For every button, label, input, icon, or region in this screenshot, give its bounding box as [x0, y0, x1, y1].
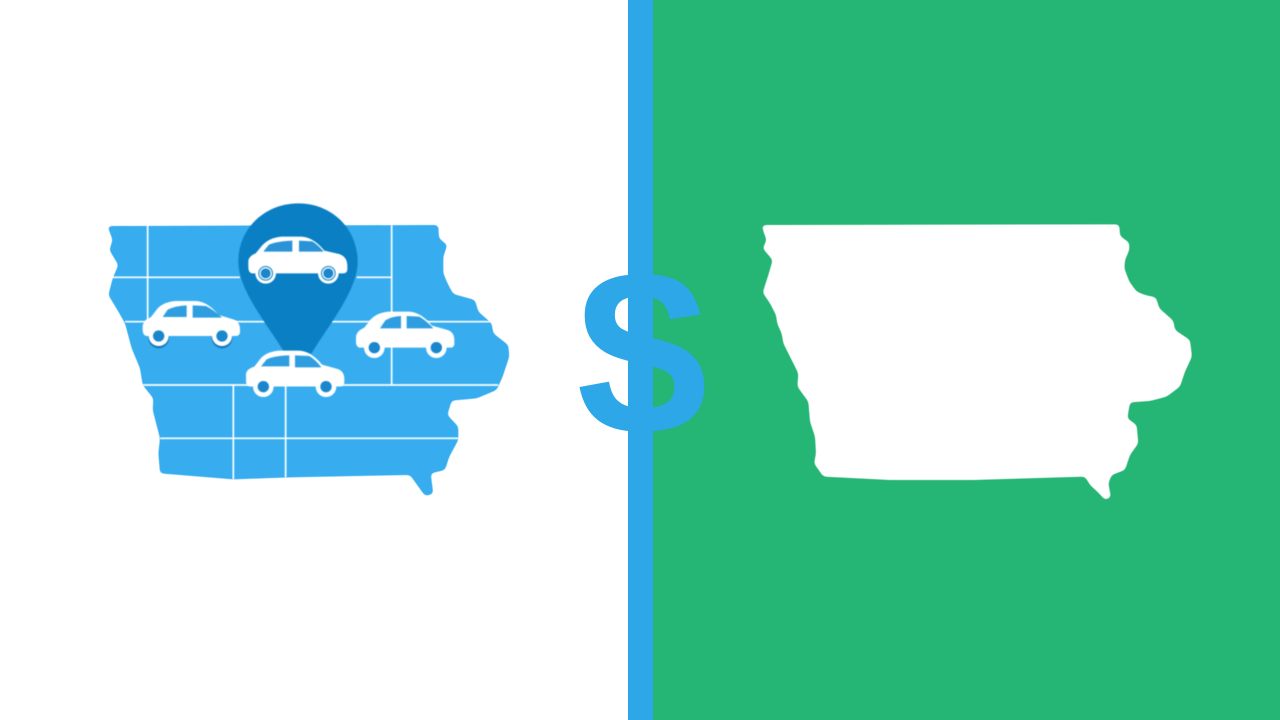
map: white county lines [112, 225, 498, 479]
icon: location pin [238, 203, 358, 353]
icon: blue Iowa map with pin and cars [107, 203, 509, 496]
icon: car right [356, 312, 454, 358]
icon: dollar sign: $ [576, 221, 708, 485]
icon: car in pin [248, 237, 347, 284]
icon: car bottom [246, 351, 344, 397]
icon: car left [143, 301, 240, 348]
blue vertical divider strip [628, 0, 653, 720]
panel: green right background [652, 0, 1280, 720]
map: Iowa outline in blue [107, 225, 509, 496]
map: white Iowa silhouette [762, 224, 1192, 500]
panel: white left background [0, 0, 628, 720]
